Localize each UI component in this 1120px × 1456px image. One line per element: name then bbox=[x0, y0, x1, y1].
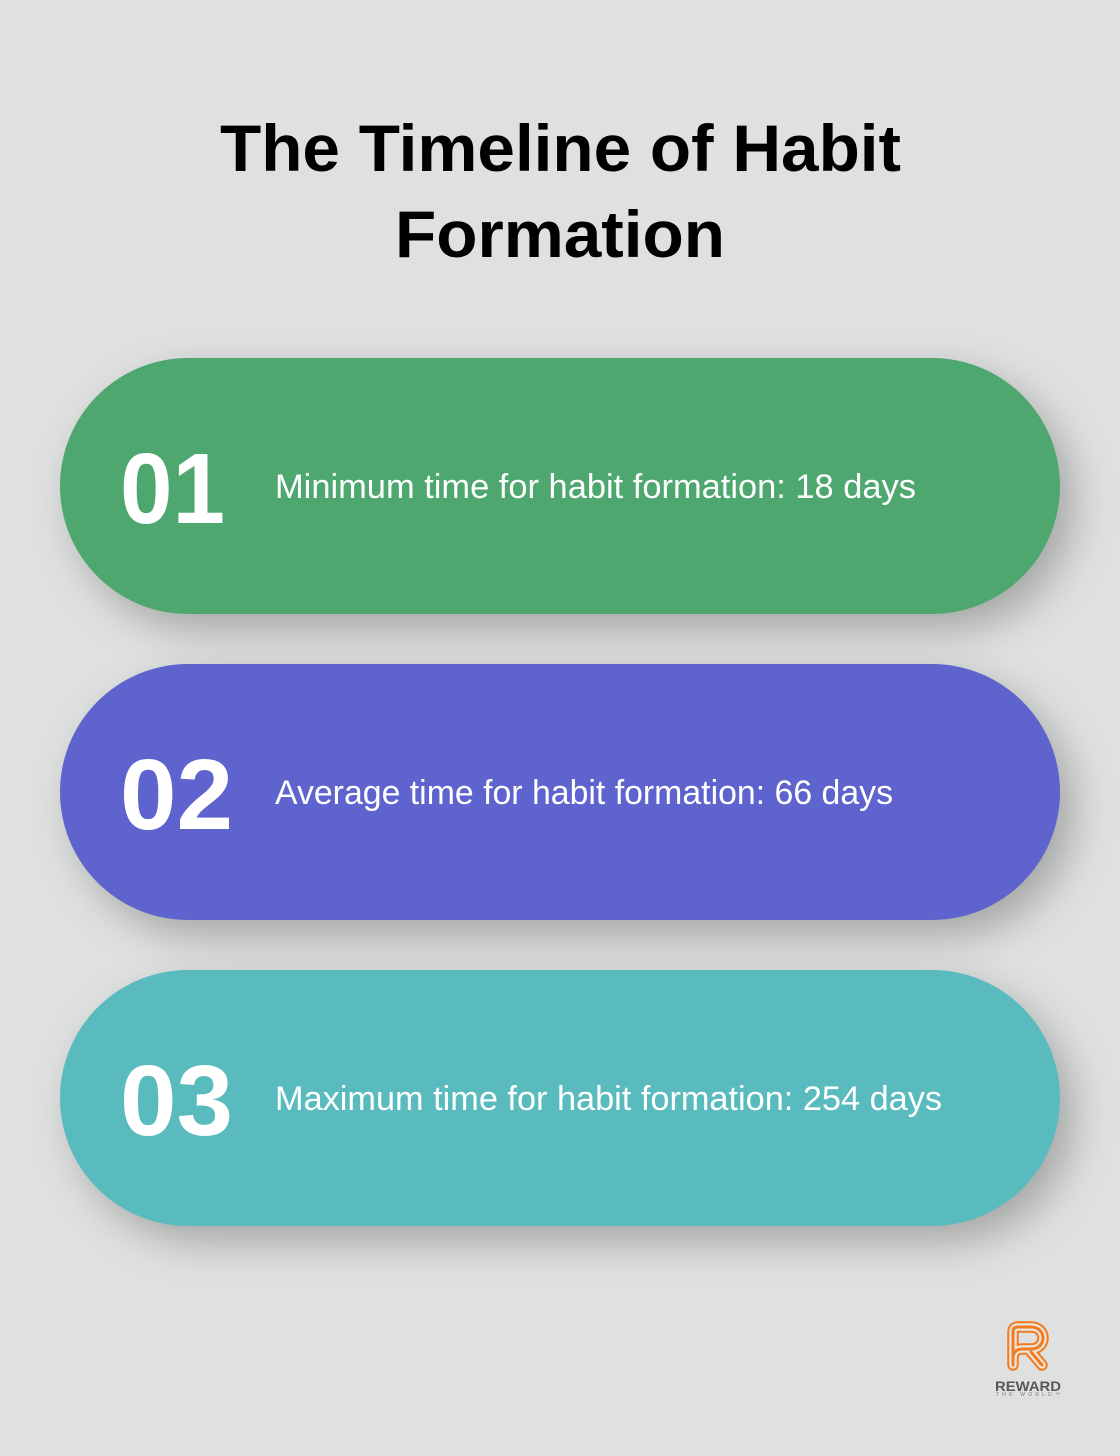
step 2 content: 02 bbox=[120, 739, 233, 851]
step 2 content: Average time for habit formation: 66 days bbox=[275, 774, 893, 812]
step 2 content bbox=[120, 739, 893, 851]
panel: step 1 pill bbox=[60, 358, 1060, 614]
title: Formation bbox=[395, 197, 725, 271]
title bbox=[220, 111, 901, 271]
step 1 content: 01 bbox=[120, 433, 225, 545]
title: The Timeline of Habit bbox=[220, 111, 901, 185]
step 1 content bbox=[120, 433, 916, 545]
step 3 content: 03 bbox=[120, 1045, 233, 1157]
icon: R mark bbox=[1013, 1327, 1043, 1365]
step 1 content: Minimum time for habit formation: 18 days bbox=[275, 468, 916, 506]
panel: step 3 pill bbox=[60, 970, 1060, 1226]
step 3 content bbox=[120, 1045, 942, 1157]
panel: step 2 pill bbox=[60, 664, 1060, 920]
logo wordmark: REWARD bbox=[995, 1378, 1061, 1394]
step 3 content: Maximum time for habit formation: 254 days bbox=[275, 1080, 942, 1118]
logo tagline: THE WORLD™ bbox=[996, 1392, 1060, 1398]
logo: Reward the World bbox=[995, 1327, 1061, 1398]
